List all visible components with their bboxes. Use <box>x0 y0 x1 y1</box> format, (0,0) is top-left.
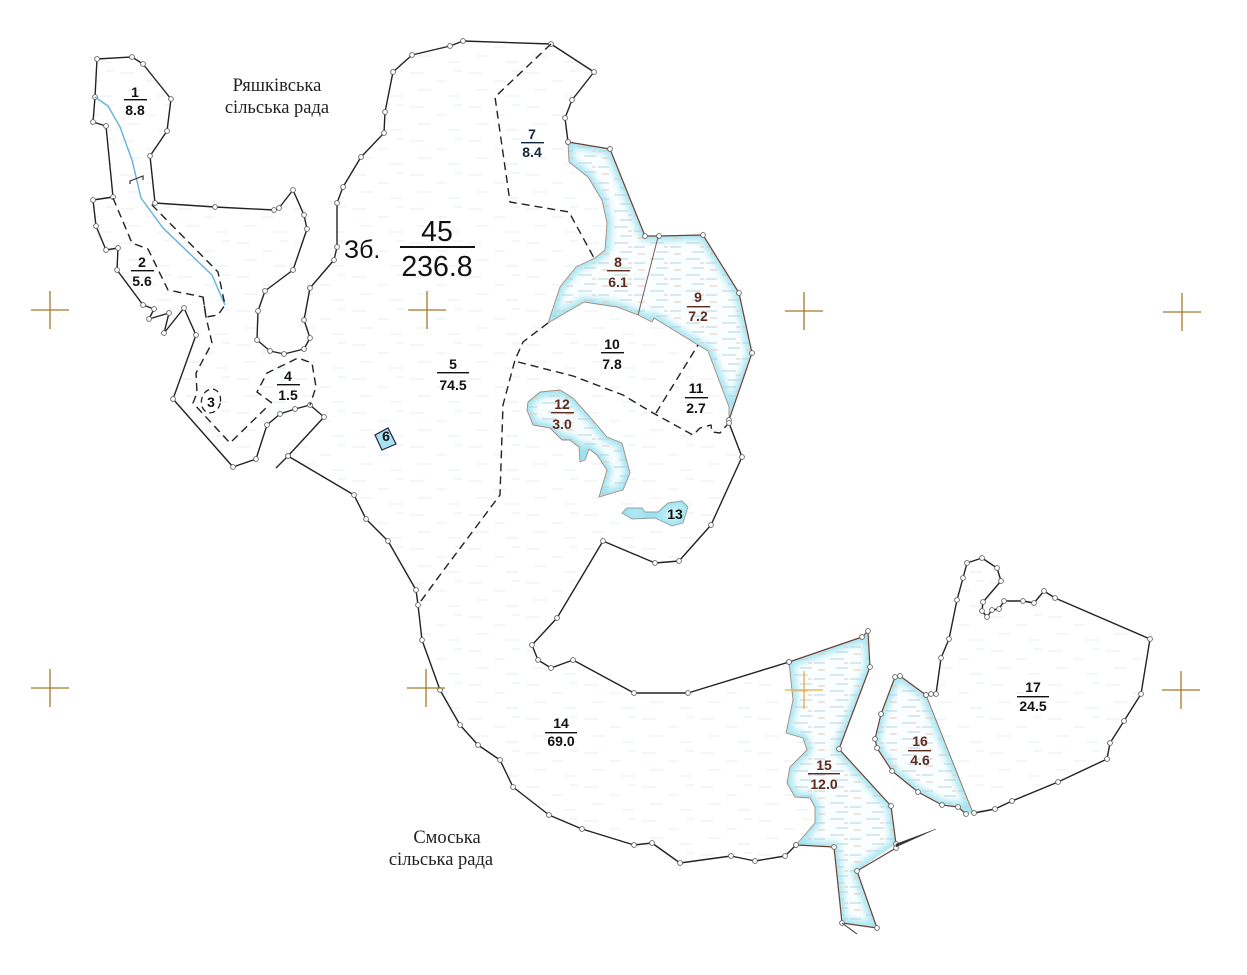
parcel label 5 <box>437 356 469 393</box>
parcel label 12 <box>551 396 574 432</box>
parcel label 8: 6.1 <box>608 274 628 290</box>
parcel label 8 <box>607 254 630 290</box>
parcel label 15 <box>808 757 840 792</box>
wet parcel 15 <box>786 631 896 934</box>
parcel label 11 <box>685 380 708 416</box>
river <box>95 97 225 305</box>
parcel label 7: 8.4 <box>522 144 542 160</box>
parcel label 17: 24.5 <box>1019 698 1047 714</box>
label: Smoska council: сільська рада <box>389 850 493 870</box>
parcel label 12: 3.0 <box>552 416 572 432</box>
dashed boundary: parcel 2 and river strip <box>113 198 225 317</box>
boundary: inner bay outline <box>532 423 789 693</box>
parcel label 4: 1.5 <box>278 387 298 403</box>
parcel label 14: 14 <box>553 715 569 731</box>
parcel label 11: 2.7 <box>686 400 706 416</box>
parcel label 5: 5 <box>449 356 457 372</box>
land texture: parcel 17 <box>926 558 1150 813</box>
boundary: parcel 17 outline <box>926 558 1150 813</box>
parcel label 13: 13 <box>667 506 683 522</box>
parcel label 10: 7.8 <box>602 356 622 372</box>
dashed boundary: parcel 10 south <box>518 362 727 435</box>
parcel label 4: 4 <box>284 368 292 384</box>
dashed boundary: parcel 7 <box>495 44 594 258</box>
parcel label 8: 8 <box>614 254 622 270</box>
boundary: northern and western outline <box>93 41 594 467</box>
compartment heading: Зб. <box>344 236 380 264</box>
parcel label 17: 17 <box>1025 679 1041 695</box>
boundary: tail stroke <box>276 456 288 468</box>
parcel label 2 <box>131 254 154 289</box>
boundary: southern outline <box>288 456 796 863</box>
parcel label 12: 12 <box>554 396 570 412</box>
label: Ryashkiv council: Ряшківська <box>233 76 321 96</box>
parcel label 9: 9 <box>694 289 702 305</box>
parcel label 15: 15 <box>816 757 832 773</box>
parcel label 5: 74.5 <box>439 377 467 393</box>
grid crosses <box>31 291 1201 709</box>
parcel label 14: 69.0 <box>547 733 575 749</box>
parcel label 4 <box>277 368 300 403</box>
compartment heading <box>344 216 475 283</box>
parcel label 15: 12.0 <box>810 776 838 792</box>
parcel label 10 <box>601 336 624 372</box>
wet parcel 16 <box>875 676 973 814</box>
boundary: spike at parcel 15 <box>896 829 936 847</box>
lake parcel 13 <box>622 501 688 526</box>
parcel label 11: 11 <box>689 380 704 396</box>
parcel 6 small plot <box>375 428 396 450</box>
land texture: main forest compartment <box>93 41 815 863</box>
parcel label 2: 5.6 <box>132 273 152 289</box>
dashed boundary: south-west strip <box>193 297 267 443</box>
river tick mark <box>130 176 143 184</box>
lake parcel 12 <box>527 390 630 497</box>
parcel label 9: 7.2 <box>688 308 708 324</box>
parcel label 7: 7 <box>528 126 536 142</box>
parcel label 16 <box>908 733 931 768</box>
dashed boundary: parcel 4 <box>257 358 316 405</box>
parcel label 3: 3 <box>207 394 215 410</box>
compartment heading: 236.8 <box>401 251 473 283</box>
parcel label 1 <box>124 84 147 118</box>
parcel label 14 <box>545 715 577 749</box>
dashed boundary: parcel 5 east side <box>418 323 548 605</box>
parcel label 16: 4.6 <box>910 752 930 768</box>
parcel label 10: 10 <box>604 336 620 352</box>
label: Ryashkiv council: сільська рада <box>225 98 329 118</box>
parcel label 17 <box>1017 679 1049 714</box>
parcel label 1: 1 <box>131 84 139 100</box>
label: Smoska council: Смоська <box>413 828 481 848</box>
parcel label 9 <box>687 289 710 324</box>
parcel label 1: 8.8 <box>125 102 145 118</box>
compartment heading: 45 <box>421 216 453 248</box>
parcel label 7 <box>521 126 544 160</box>
wet parcels 8 and 9 <box>548 142 752 420</box>
parcel label 2: 2 <box>138 254 146 270</box>
parcel label 16: 16 <box>912 733 928 749</box>
dashed boundary: parcel 10 and 11 <box>656 345 698 413</box>
dashed boundary: parcel 3 <box>199 387 223 415</box>
parcel label 6: 6 <box>382 428 390 444</box>
